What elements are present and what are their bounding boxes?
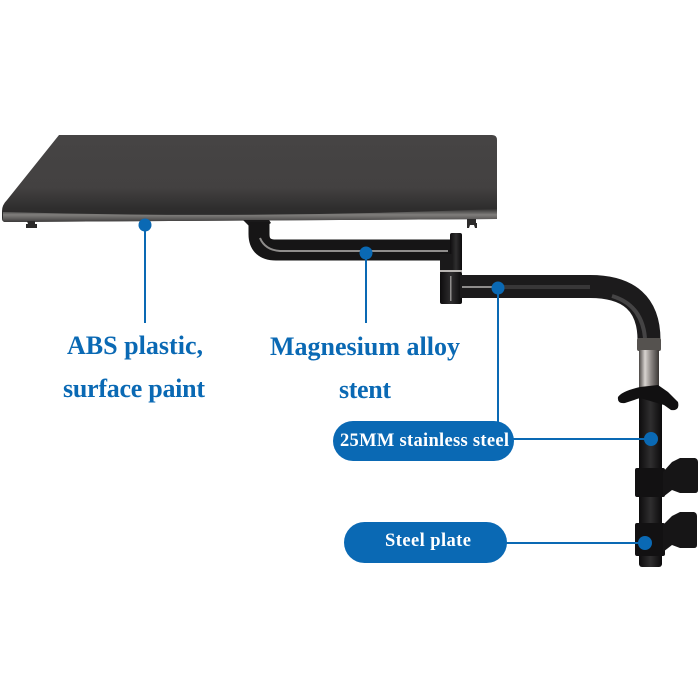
grey collar (637, 338, 661, 351)
label: surface paint: surface paint (63, 374, 205, 403)
table foot right (467, 219, 477, 228)
lower black tube (639, 391, 662, 567)
magnesium alloy arm (243, 220, 462, 273)
callout: ABS plastic (63, 218, 205, 403)
clamp lower (635, 512, 697, 556)
label: ABS plastic: ABS plastic, (67, 331, 203, 360)
locking lever (618, 385, 678, 410)
label: steel plate: Steel plate (385, 531, 471, 551)
label: stent: stent (339, 375, 391, 404)
joint post (440, 270, 462, 304)
chrome tube (639, 350, 659, 392)
callout: steel plate (344, 522, 652, 563)
label: magnesium alloy: Magnesium alloy (270, 332, 460, 361)
table foot left (26, 221, 37, 228)
tabletop (2, 135, 497, 228)
callout: magnesium alloy stent (270, 246, 460, 404)
clamp upper (635, 458, 698, 497)
label: 25MM stainless steel: 25MM stainless steel (340, 431, 509, 451)
stainless steel arm (460, 286, 649, 340)
callout: 25MM stainless steel (333, 282, 658, 461)
